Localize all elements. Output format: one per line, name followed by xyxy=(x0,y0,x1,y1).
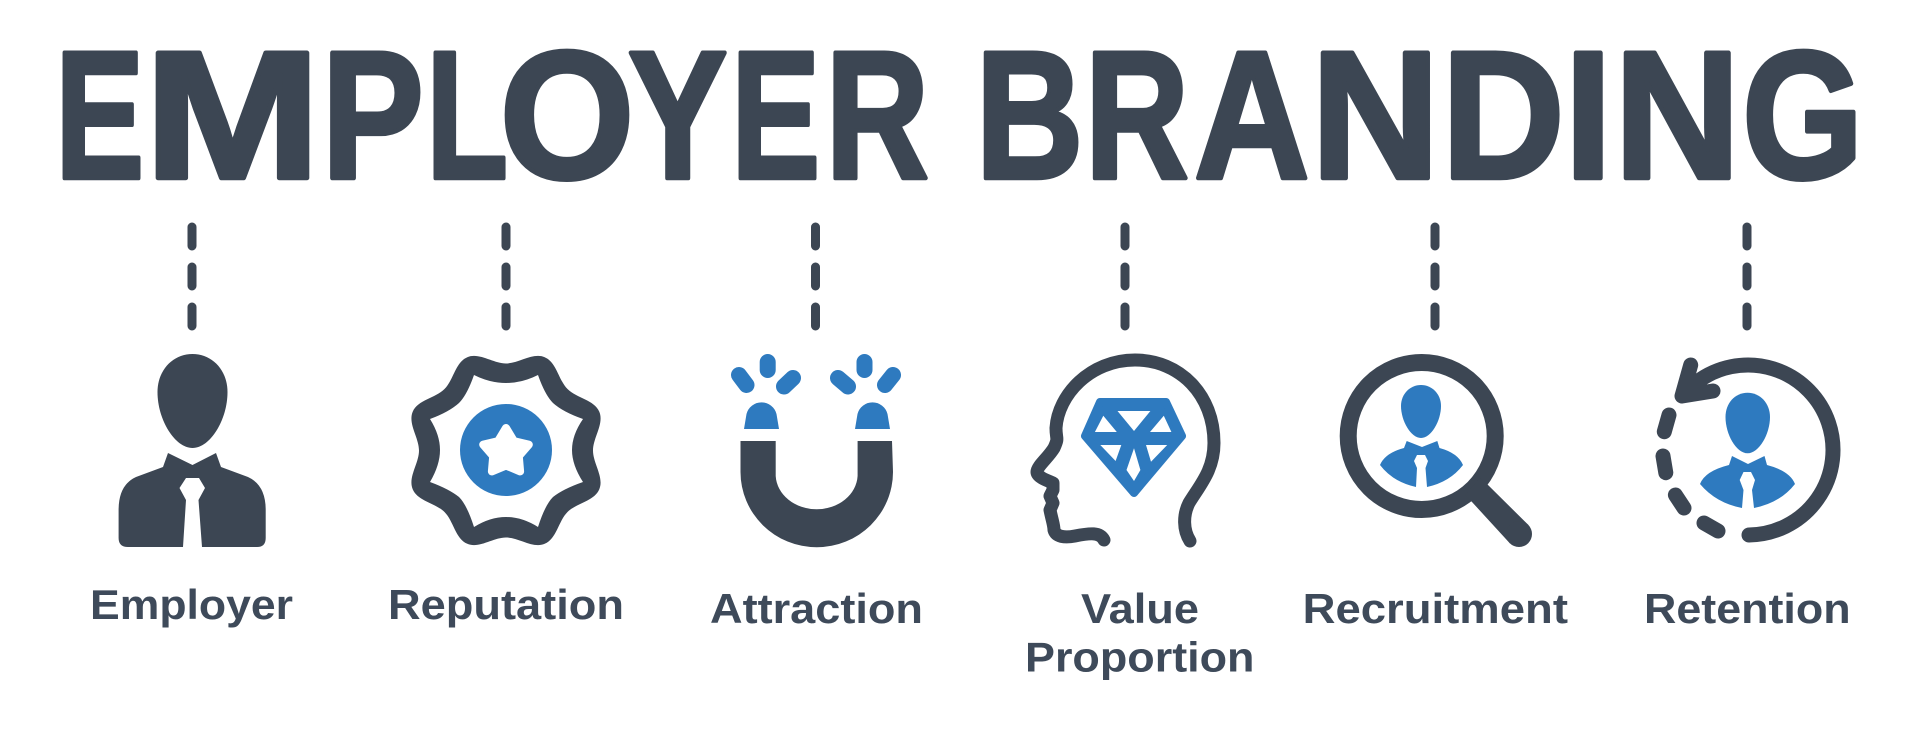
label: Value Proportion: Proportion xyxy=(1025,634,1254,681)
title: R xyxy=(826,13,929,217)
label: Reputation: Reputation xyxy=(388,581,624,628)
dashed connector: employer xyxy=(188,227,196,326)
title: P xyxy=(322,13,424,217)
title: E xyxy=(55,14,144,217)
title: N xyxy=(1614,14,1740,217)
label: Employer: Employer xyxy=(90,581,293,628)
icon: magnifier with person xyxy=(1348,362,1532,547)
title: L xyxy=(426,13,508,217)
title: O xyxy=(500,13,634,217)
title: B xyxy=(976,14,1083,217)
label: Attraction: Attraction xyxy=(710,585,923,632)
title: R xyxy=(1085,14,1189,217)
title: I xyxy=(1564,14,1612,217)
icon: retention cycle with person xyxy=(1663,365,1833,535)
label: Value Proportion xyxy=(1025,585,1254,681)
title: G xyxy=(1742,14,1863,217)
icon: magnet xyxy=(739,362,893,547)
title: E xyxy=(731,14,820,217)
title xyxy=(55,13,1863,217)
label: Value Proportion: Value xyxy=(1081,585,1199,632)
dashed connector: value proportion xyxy=(1120,227,1130,326)
label: Retention: Retention xyxy=(1644,585,1851,632)
dashed connector: reputation xyxy=(502,227,510,326)
title: M xyxy=(144,13,321,217)
title: N xyxy=(1311,14,1440,217)
icon: employer xyxy=(119,354,266,547)
label: Recruitment: Recruitment xyxy=(1303,585,1568,632)
title: A xyxy=(1194,15,1310,217)
dashed connector: recruitment xyxy=(1430,227,1440,326)
dashed connector: attraction xyxy=(811,227,820,326)
title: D xyxy=(1442,14,1565,217)
icon: reputation badge xyxy=(411,356,601,545)
title: Y xyxy=(628,14,727,217)
icon: head with diamond xyxy=(1037,360,1214,541)
dashed connector: retention xyxy=(1742,227,1752,326)
